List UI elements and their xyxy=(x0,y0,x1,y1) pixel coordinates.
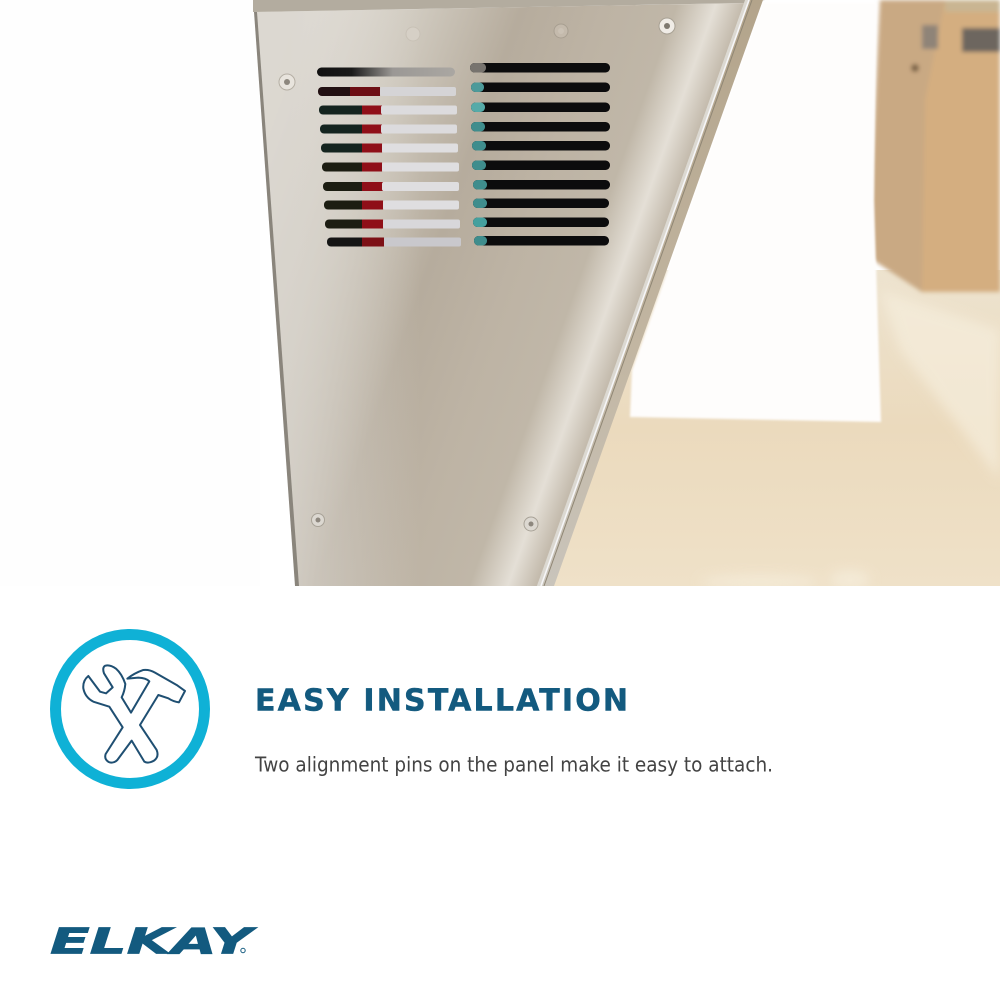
vent slots: left column xyxy=(317,68,461,246)
background: cardboard box xyxy=(870,0,1000,292)
screws and alignment pins xyxy=(279,18,675,531)
photo: stainless steel vent panel xyxy=(0,0,1000,590)
left white wall xyxy=(0,0,260,586)
background: floor xyxy=(540,270,1000,586)
steel panel body xyxy=(255,3,748,586)
logo: Elkay: ELKAY xyxy=(50,922,258,962)
body text: Two alignment pins on the panel make it easy to attach. xyxy=(254,752,773,776)
background: white board xyxy=(630,3,881,422)
panel left edge xyxy=(254,12,299,586)
vent slots: right column xyxy=(470,63,610,246)
icon: tools in cyan ring xyxy=(56,634,204,784)
icon: crossed wrench and hammer outline xyxy=(83,665,185,763)
logo: Elkay xyxy=(50,922,258,962)
top housing strip xyxy=(253,0,765,12)
bent edge rod xyxy=(537,0,763,586)
white info panel xyxy=(0,586,1000,1000)
background: floor highlights xyxy=(700,290,1000,590)
heading: EASY INSTALLATION xyxy=(255,684,628,718)
